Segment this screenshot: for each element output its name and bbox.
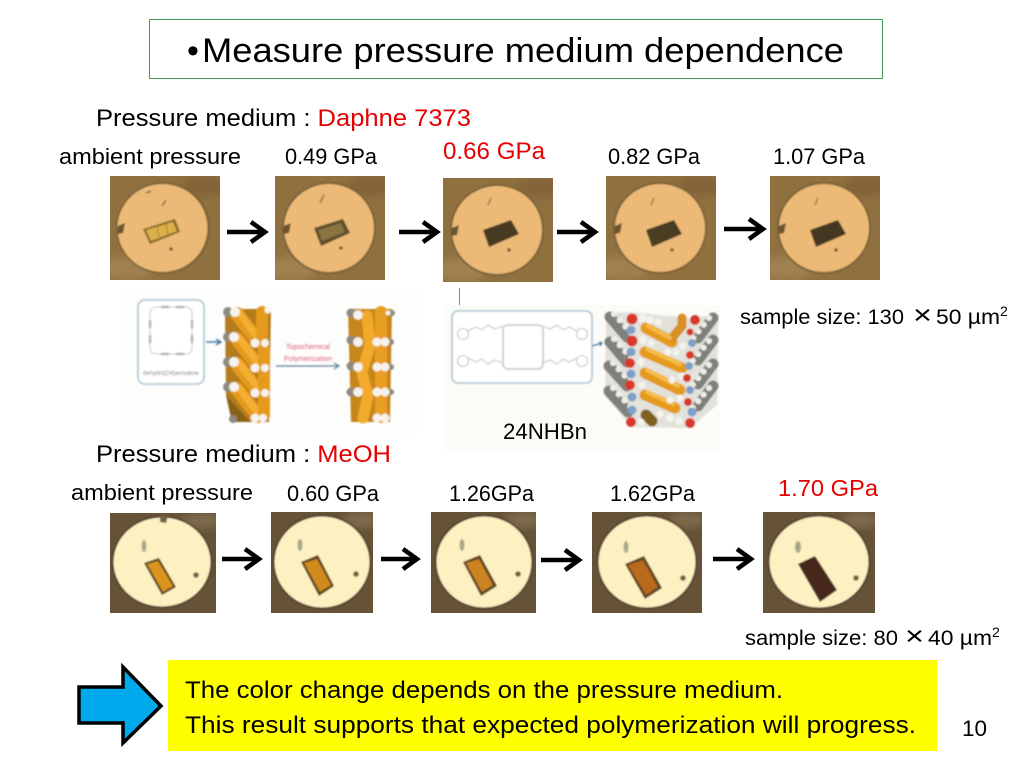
heading: MeOH medium: Pressure medium : MeOH: [96, 441, 391, 468]
pressure labels: Daphne series: ambient pressure: [59, 144, 241, 169]
diagram: 24NHBn: [445, 288, 720, 450]
title: Measure pressure medium dependence: [202, 32, 844, 70]
sample size: Daphne series: ×: [913, 300, 932, 330]
arrow: [713, 549, 751, 569]
photo: MeOH ambient pressure: [110, 513, 222, 613]
photo: Daphne ambient pressure: [110, 176, 220, 280]
arrow: [222, 549, 259, 569]
polymerization label: Topochemical: [286, 344, 330, 351]
pressure labels: Daphne series: 0.49 GPa: [285, 144, 378, 169]
photo: Daphne 0.82 GPa: [606, 176, 716, 280]
arrow: conclusion: [79, 667, 161, 743]
sample size: Daphne series: 50 µm: [936, 306, 1000, 329]
molecule box: dehydro[24]annulene: dehydro[24]annulene: [143, 371, 200, 377]
callout: conclusion: The color change depends on the pressure medium.: [185, 677, 783, 704]
pressure labels: MeOH series: 0.60 GPa: [287, 481, 380, 506]
title: •: [187, 32, 199, 70]
arrow: [724, 219, 763, 239]
label: 24NHBn: 24NHBn: [503, 419, 587, 444]
molecule box: dehydro[24]annulene: [138, 300, 204, 384]
molecule box: 24NHBn: [452, 311, 592, 383]
molecular stack: after: [346, 308, 395, 422]
molecular assembly: [605, 312, 718, 428]
polymerization label: Polymerization: [284, 356, 332, 363]
callout: conclusion: This result supports that expected polymerization will progress.: [185, 712, 916, 739]
pressure labels: MeOH series: 1.26GPa: [449, 481, 535, 506]
arrow: [381, 549, 417, 569]
photo: MeOH 1.70 GPa: [763, 512, 878, 613]
photo: Daphne 1.07 GPa: [770, 176, 880, 280]
arrow: [227, 222, 265, 242]
sample size: MeOH series: 40 µm: [928, 627, 992, 650]
polymerization label: [276, 344, 339, 369]
sample size: Daphne series: sample size: 130: [740, 306, 904, 329]
sample size: MeOH series: ×: [905, 621, 924, 651]
photo: MeOH 1.62 GPa: [592, 512, 705, 613]
sample size: MeOH series: 2: [992, 624, 1000, 640]
sample size: MeOH series: [745, 621, 1000, 651]
sample size: Daphne series: 2: [1000, 303, 1008, 319]
pressure labels: MeOH series: ambient pressure: [71, 480, 253, 505]
pressure labels: MeOH series: 1.62GPa: [610, 481, 696, 506]
pressure labels: Daphne series: [59, 138, 866, 169]
pressure labels: Daphne series: 1.07 GPa: [773, 144, 866, 169]
arrow: [399, 222, 437, 242]
photo: Daphne 0.49 GPa: [275, 176, 385, 280]
page number: 10: [962, 716, 987, 741]
photo: MeOH 1.26 GPa: [431, 512, 541, 613]
photo: MeOH 0.60 GPa: [271, 512, 379, 613]
arrow: [557, 222, 595, 242]
pressure labels: MeOH series: [71, 475, 878, 506]
arrow to assembly: [592, 342, 602, 346]
pressure labels: Daphne series: 0.82 GPa: [608, 144, 701, 169]
sample size: MeOH series: sample size: 80: [745, 627, 898, 650]
callout: conclusion: [168, 660, 937, 751]
sample size: Daphne series: [740, 300, 1008, 330]
photo: Daphne 0.66 GPa: [443, 178, 553, 282]
title: [150, 20, 882, 78]
molecular stack: before: [223, 306, 272, 423]
pressure labels: MeOH series: 1.70 GPa: [778, 475, 878, 501]
arrow to stack: [206, 339, 221, 345]
pressure labels: Daphne series: 0.66 GPa: [443, 138, 546, 165]
arrow: [541, 550, 579, 570]
diagram: dehydro[24]annulene polymerization: [120, 290, 418, 435]
heading: Daphne 7373 medium: Pressure medium : Daphne 7373: [96, 105, 471, 132]
